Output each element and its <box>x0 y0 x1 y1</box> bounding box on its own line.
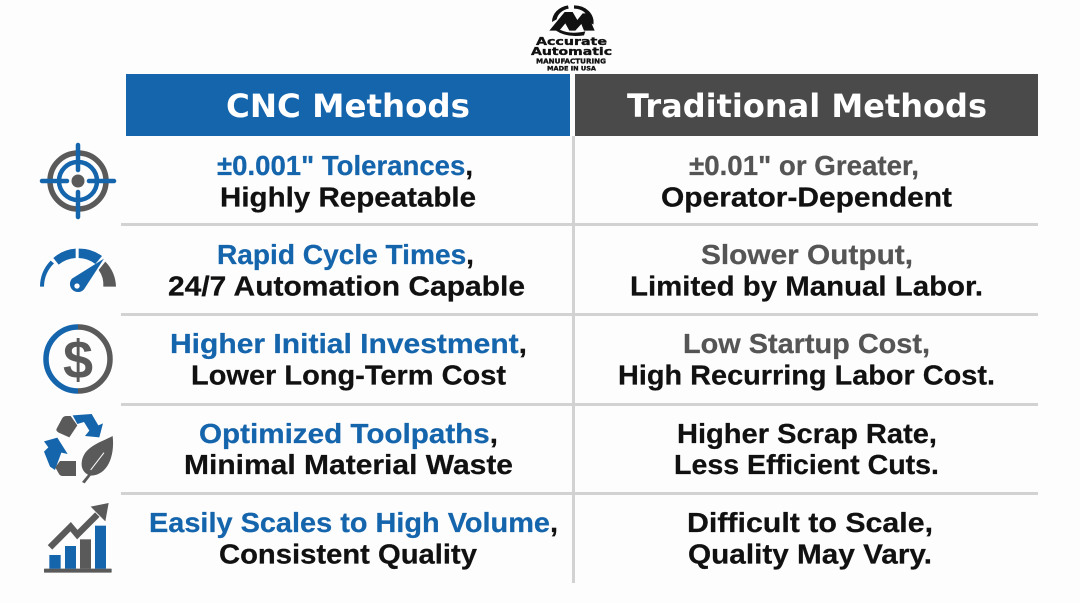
traditional scalability text <box>687 507 933 570</box>
row 1: tolerances <box>217 150 952 212</box>
header: Traditional Methods <box>575 74 1038 136</box>
CNC waste text <box>184 418 513 480</box>
header: CNC Methods <box>126 74 570 136</box>
CNC cost text <box>170 328 527 390</box>
CNC tolerances text: Highly Repeatable <box>220 182 476 212</box>
logo: Accurate Automatic Manufacturing <box>531 5 612 73</box>
CNC speed text <box>168 239 525 302</box>
icon: growth bar chart <box>44 503 112 573</box>
traditional tolerances text: Operator-Dependent <box>661 182 952 212</box>
traditional tolerances text: ±0.01" or Greater, <box>689 150 919 181</box>
icon: dollar coin <box>46 327 110 391</box>
traditional cost text: High Recurring Labor Cost. <box>618 360 995 390</box>
CNC cost text: Higher Initial Investment , <box>170 328 527 359</box>
CNC waste text: Optimized Toolpaths , <box>199 418 498 449</box>
row 5: scalability <box>149 507 933 570</box>
icon: target <box>42 145 114 217</box>
CNC tolerances text <box>217 150 476 212</box>
traditional cost text <box>618 328 995 390</box>
traditional cost text: Low Startup Cost, <box>683 328 930 359</box>
traditional tolerances text <box>661 150 952 212</box>
logo: Accurate Automatic Manufacturing: MANUFACTURING <box>536 58 606 66</box>
traditional waste text <box>674 418 939 480</box>
CNC speed text: 24/7 Automation Capable <box>168 270 525 302</box>
CNC waste text: Minimal Material Waste <box>184 449 513 480</box>
icon: speedometer <box>40 249 116 292</box>
traditional scalability text: Quality May Vary. <box>688 538 932 570</box>
row 4: waste <box>184 418 939 480</box>
traditional waste text: Higher Scrap Rate, <box>677 418 937 449</box>
traditional speed text: Slower Output, <box>701 239 913 270</box>
CNC tolerances text: ±0.001" Tolerances, <box>217 150 473 181</box>
CNC scalability text: Easily Scales to High Volume , <box>149 507 558 538</box>
icon: dollar coin: $ <box>63 330 93 390</box>
row 3: cost <box>170 328 995 390</box>
row 2: speed <box>168 239 983 302</box>
header: Traditional Methods: Traditional Methods <box>627 87 987 125</box>
traditional speed text <box>630 239 983 302</box>
traditional waste text: Less Efficient Cuts. <box>674 449 939 480</box>
header: CNC Methods: CNC Methods <box>226 87 470 125</box>
traditional speed text: Limited by Manual Labor. <box>630 270 983 302</box>
logo: Accurate Automatic Manufacturing: Automatic <box>531 46 612 58</box>
icon: recycle and leaf <box>44 414 113 483</box>
traditional scalability text: Difficult to Scale, <box>687 507 933 538</box>
logo emblem <box>549 5 595 36</box>
logo: Accurate Automatic Manufacturing: Accurate <box>536 36 607 48</box>
CNC speed text: Rapid Cycle Times, <box>217 239 474 270</box>
CNC scalability text: Consistent Quality <box>219 538 477 570</box>
CNC cost text: Lower Long-Term Cost <box>191 360 506 390</box>
logo: Accurate Automatic Manufacturing: MADE IN USA <box>547 64 596 72</box>
CNC scalability text <box>149 507 558 570</box>
